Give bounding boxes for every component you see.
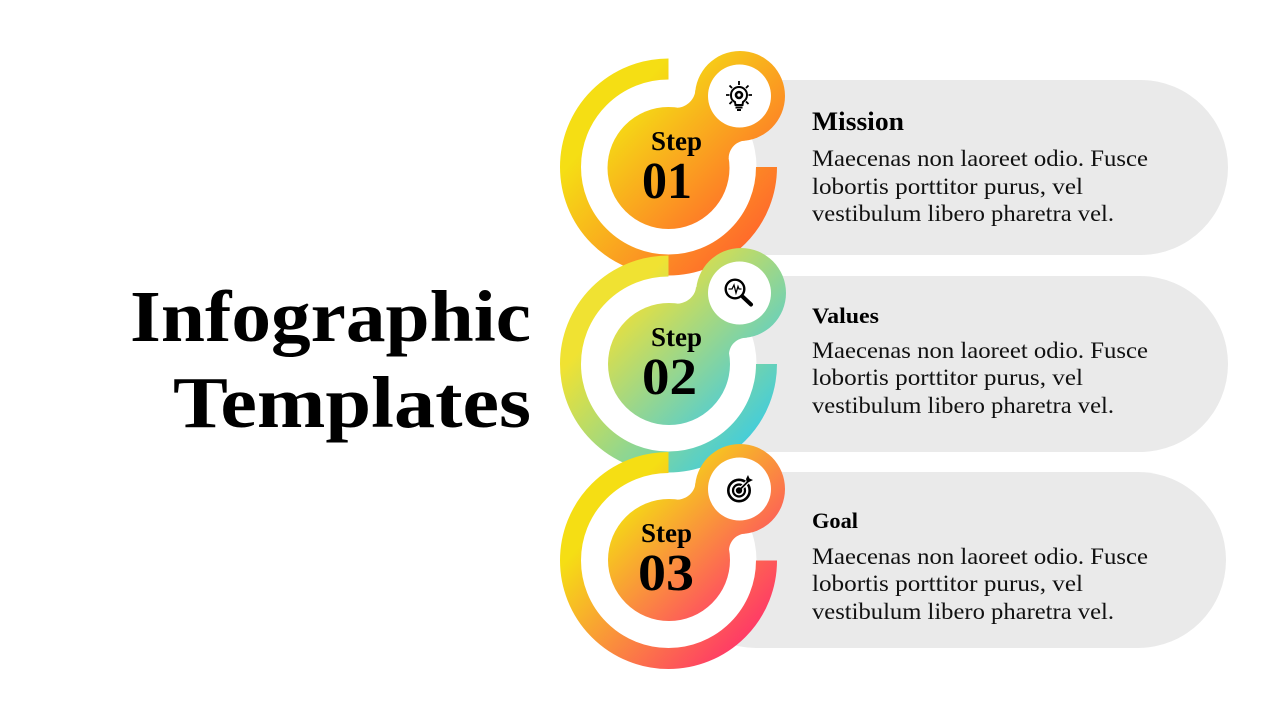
step 01 label: 01 (642, 153, 692, 210)
text block: mission: Maecenas non laoreet odio. Fusce (812, 146, 1148, 171)
ring 02 (570, 266, 766, 462)
step 02 label: Step (651, 322, 702, 352)
title (130, 276, 531, 443)
icon: target (728, 475, 753, 501)
text block: values (812, 303, 1148, 418)
text block: goal: Goal (812, 508, 858, 533)
step 01 label: Step (651, 126, 702, 156)
text block: mission: Mission (812, 107, 905, 136)
text block: goal: vestibulum libero pharetra vel. (812, 599, 1114, 624)
blob 01 (608, 51, 785, 229)
step 03 label: 03 (638, 545, 694, 602)
panel: values pill (668, 276, 1228, 452)
step 03 label: Step (641, 518, 692, 548)
text block: mission (812, 107, 1148, 226)
icon: light bulb (726, 81, 752, 110)
text block: values: lobortis porttitor purus, vel (812, 365, 1083, 390)
step 03 badge (570, 444, 785, 658)
step 03 label (638, 518, 694, 602)
text block: goal (812, 508, 1148, 624)
title: Templates (173, 362, 531, 443)
title: Infographic (130, 276, 531, 357)
step 01 label (642, 126, 702, 210)
text block: values: vestibulum libero pharetra vel. (812, 393, 1114, 418)
icon: magnifier (726, 280, 751, 304)
step 01 badge (570, 51, 785, 265)
text block: goal: Maecenas non laoreet odio. Fusce (812, 544, 1148, 569)
step 02 badge (570, 248, 786, 462)
text block: mission: lobortis porttitor purus, vel (812, 174, 1083, 199)
text block: goal: lobortis porttitor purus, vel (812, 571, 1083, 596)
text block: mission: vestibulum libero pharetra vel. (812, 201, 1114, 226)
blob 03 (608, 444, 785, 621)
step 02 label (642, 322, 702, 406)
ring 03 (570, 462, 766, 658)
text block: values: Maecenas non laoreet odio. Fusce (812, 338, 1148, 363)
ring 01 (570, 69, 766, 265)
panel: goal pill (668, 472, 1226, 648)
text block: values: Values (812, 303, 879, 328)
panel: mission pill (668, 80, 1228, 255)
step 02 label: 02 (642, 349, 697, 406)
blob 02 (608, 248, 786, 425)
